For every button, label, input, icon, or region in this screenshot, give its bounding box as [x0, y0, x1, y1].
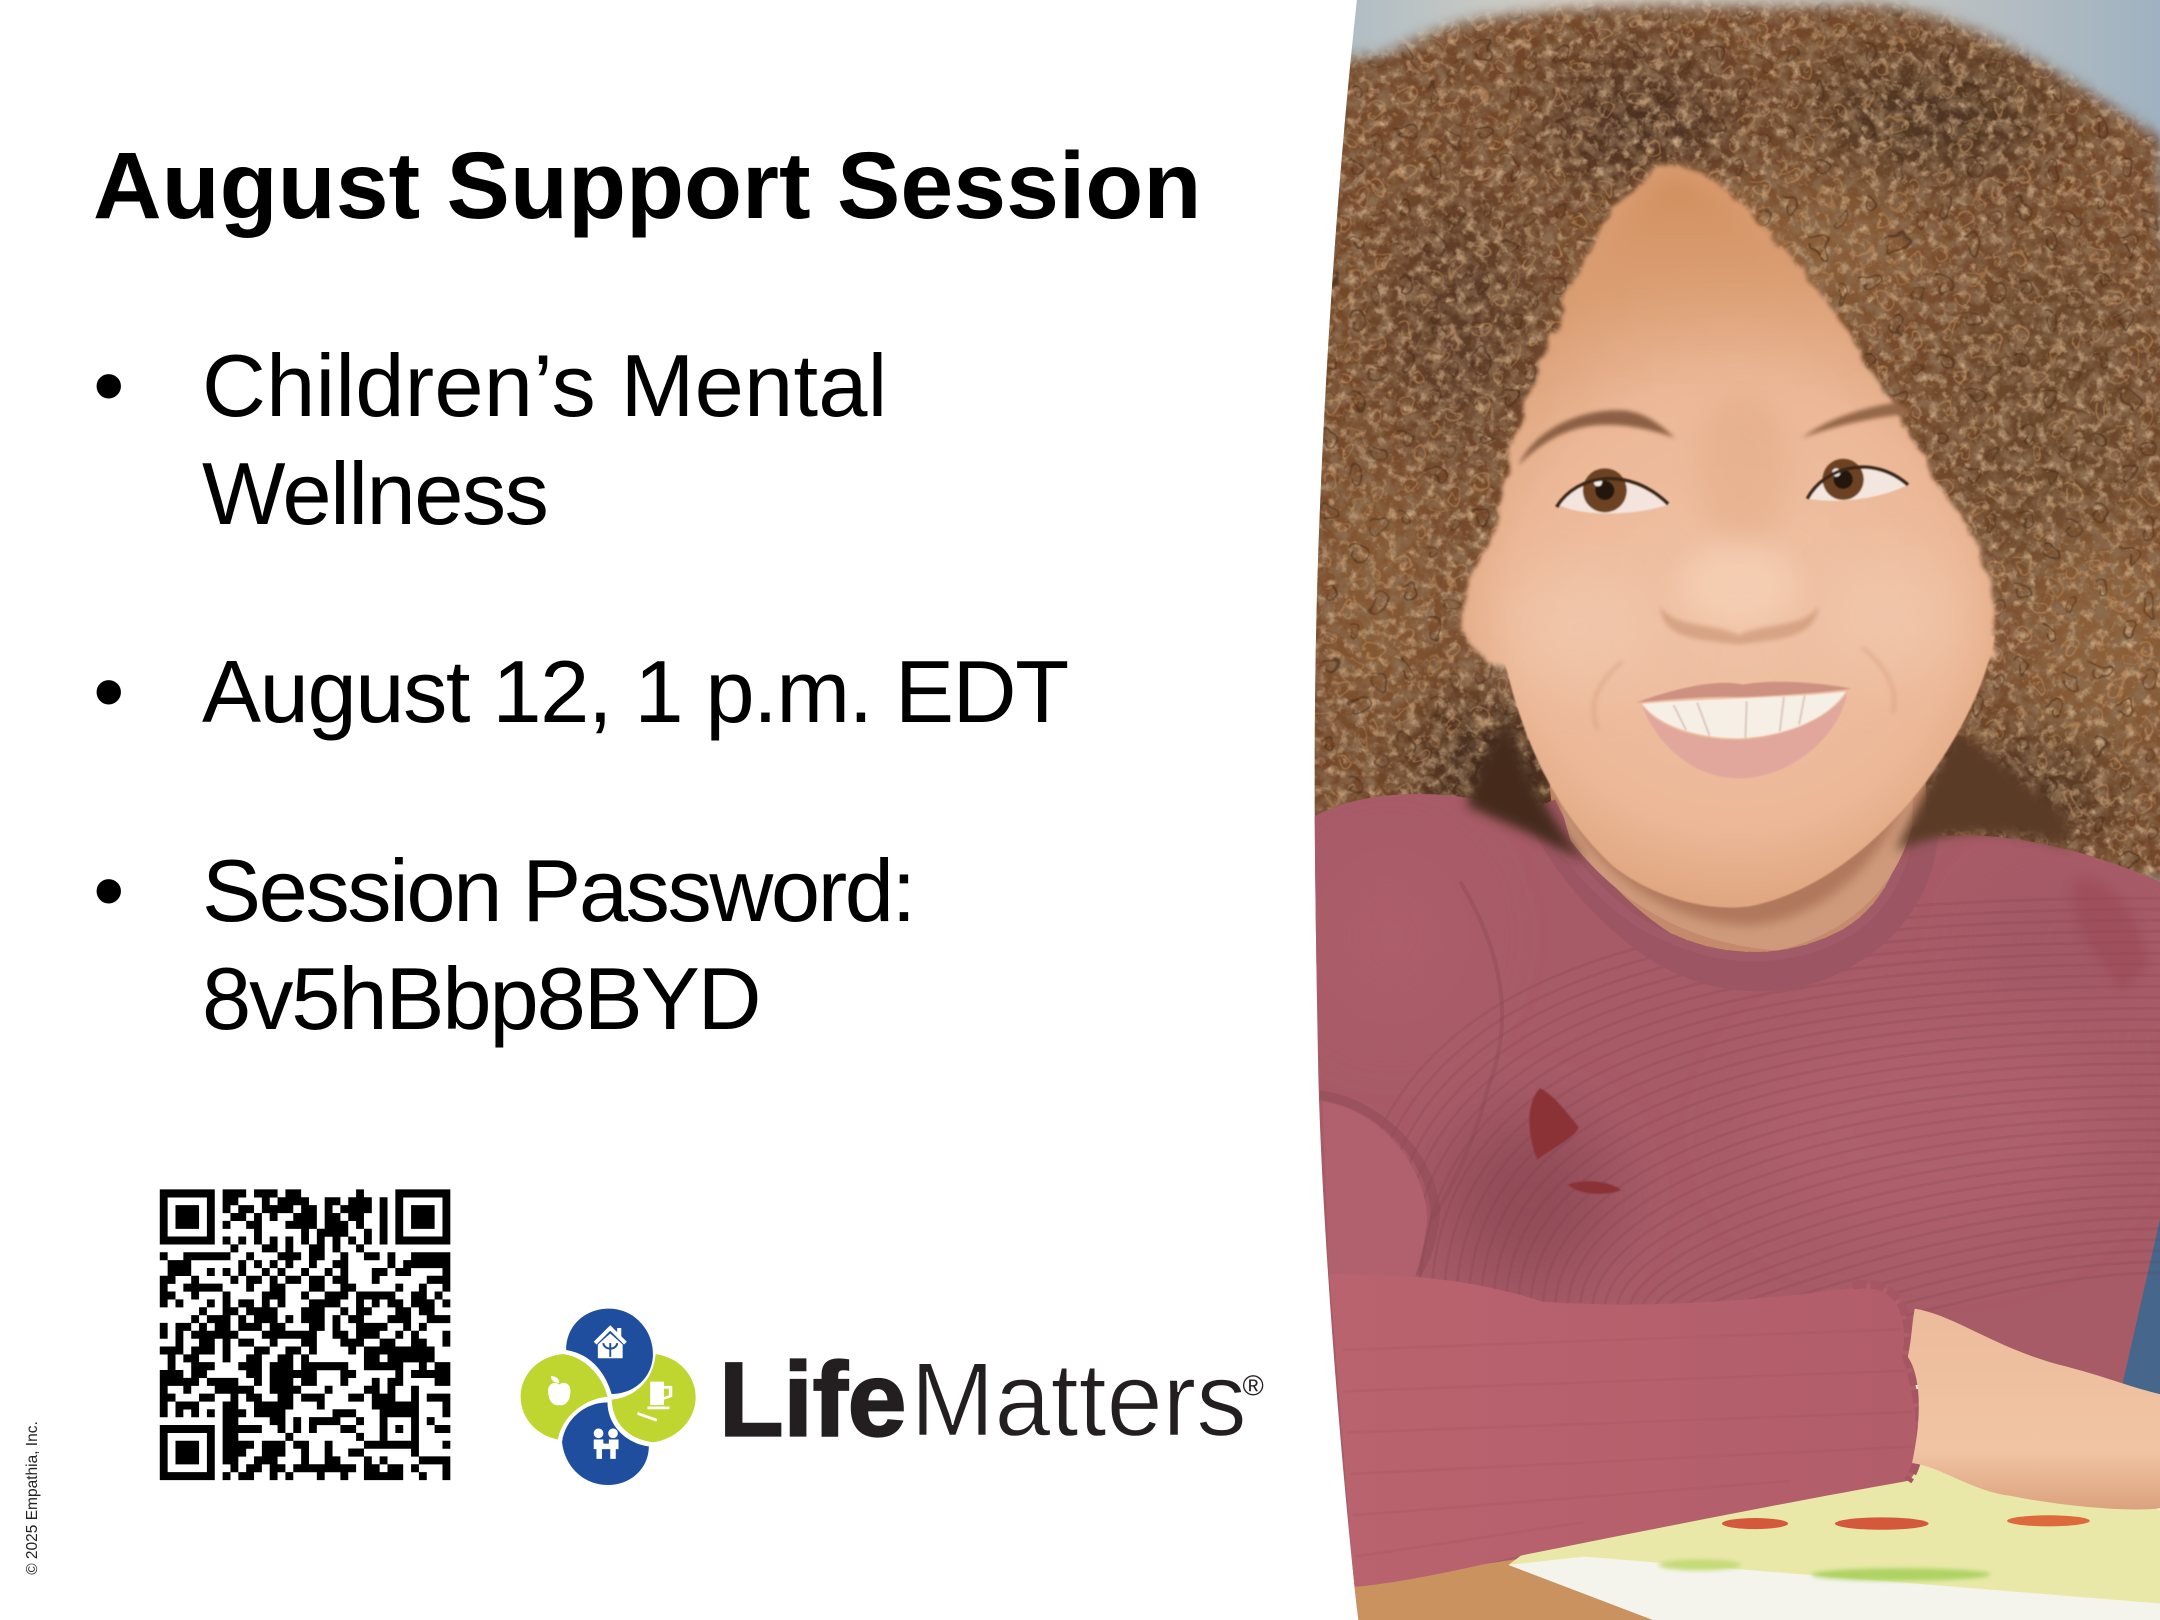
sleeve ribs — [1343, 1329, 1915, 1557]
neck — [1550, 781, 1926, 952]
logo wordmark: Life: Life — [719, 1341, 906, 1458]
hair around jaw — [1467, 716, 2066, 861]
paper on table — [1508, 1453, 2160, 1620]
forehead tone — [1578, 158, 1800, 271]
nose — [1660, 544, 1818, 645]
photo: smiling child with curly hair — [1267, 0, 2160, 1620]
copyright note: © 2025 Empathia, Inc. — [24, 1421, 41, 1575]
logo petal: bottom blue — [562, 1402, 649, 1485]
eye socket shade — [1696, 393, 1789, 544]
bullet 1: • — [93, 336, 125, 436]
blue chair behind arm — [2122, 1219, 2160, 1394]
logo icon: parent and child — [594, 1429, 619, 1459]
left eye — [1557, 468, 1670, 514]
logo petal: left green — [521, 1354, 608, 1440]
forearm sleeve — [1329, 1274, 1921, 1587]
left eyebrow — [1518, 410, 1675, 466]
logo petal: top blue — [566, 1309, 653, 1394]
logo petal: right green — [612, 1354, 696, 1442]
mouth — [1637, 682, 1851, 778]
bullet 3: • — [93, 841, 125, 941]
right eyebrow — [1802, 402, 1915, 438]
logo icon: house with plant — [594, 1325, 627, 1358]
title: August Support Session — [93, 133, 1201, 239]
session password text: Session Password: — [202, 841, 914, 940]
topic text: Wellness — [202, 444, 547, 543]
bullet list — [93, 336, 1068, 1048]
QR code — [156, 1186, 454, 1484]
registered mark: ® — [1243, 1370, 1264, 1402]
collar ruffle — [1540, 806, 1922, 975]
session password text — [202, 841, 914, 1048]
sweater body — [1309, 794, 2160, 1620]
cuff ruffle — [1853, 1284, 1920, 1481]
topic text — [202, 336, 888, 543]
hand — [1908, 1309, 2160, 1510]
face — [1463, 163, 1995, 908]
smile lines — [1594, 647, 1894, 730]
sleeve seam — [1458, 881, 1504, 1114]
logo icon: apple — [548, 1376, 570, 1405]
logo wordmark: Matters: Matters — [911, 1341, 1247, 1458]
hair — [1267, 0, 2160, 923]
photo background — [1309, 0, 2160, 964]
bullet 2: • — [93, 642, 125, 742]
right eye — [1807, 459, 1908, 501]
cheek highlights — [1502, 565, 1653, 689]
date and time text: August 12, 1 p.m. EDT — [202, 642, 1068, 741]
session password text: 8v5hBbp8BYD — [202, 949, 759, 1048]
topic text: Children’s Mental — [202, 336, 888, 435]
logo icon: mug and pencil — [637, 1382, 672, 1422]
smooth jaw and chin — [1502, 615, 1995, 908]
faded embroidery on right shoulder — [2076, 882, 2144, 983]
neck redraw over collar — [1562, 800, 1912, 950]
table — [1350, 1559, 1667, 1620]
hair shading blobs — [1329, 55, 2160, 833]
ribbed knit — [1398, 904, 2160, 1274]
sweater shading and ribs — [1315, 882, 2160, 1316]
upper arm — [1320, 1095, 1435, 1281]
embroidery on sweater — [1529, 1088, 1621, 1194]
logo: LifeMatters — [521, 1309, 1264, 1485]
